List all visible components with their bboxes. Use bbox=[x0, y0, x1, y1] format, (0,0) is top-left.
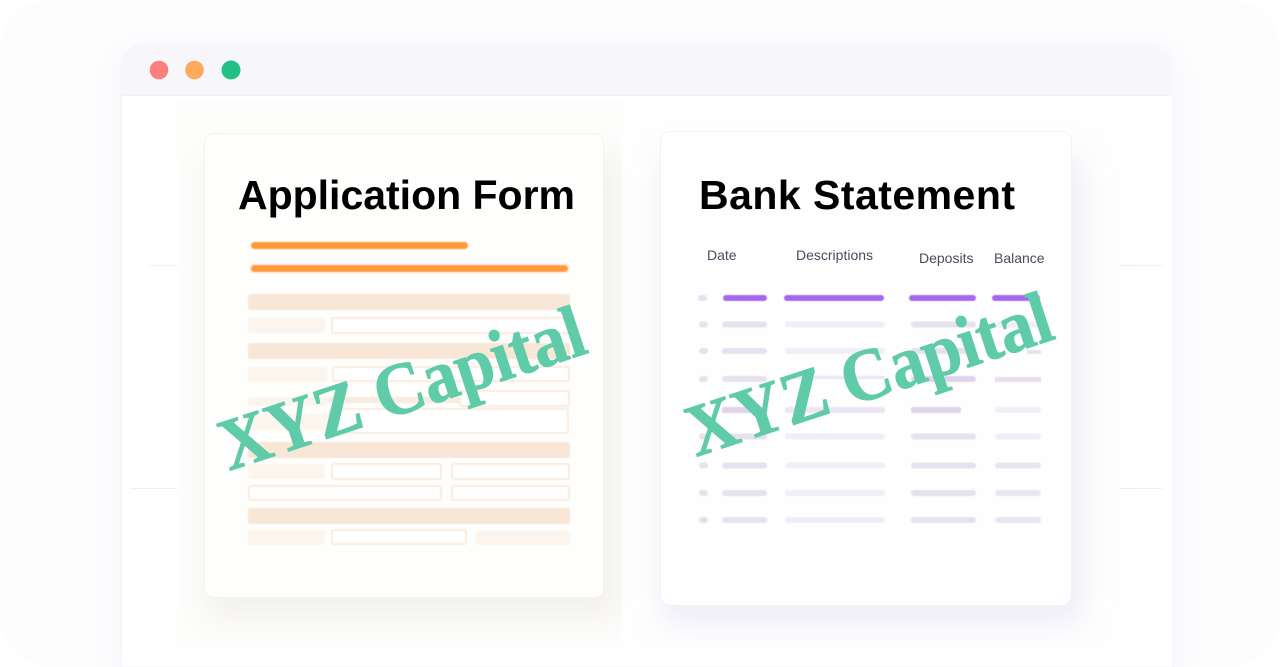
panel: bank statement bbox=[660, 132, 1082, 625]
table column headers: Date bbox=[707, 247, 737, 263]
watermark: xyz capital right: XYZ Capital bbox=[676, 277, 1062, 473]
title bar bbox=[122, 45, 1172, 95]
window control: red bbox=[150, 61, 168, 79]
table rows bbox=[699, 322, 1041, 523]
window control: green bbox=[222, 60, 240, 80]
window control: orange bbox=[185, 61, 204, 79]
heading: bank statement: Bank Statement bbox=[699, 172, 1015, 218]
content backdrop bbox=[130, 265, 1162, 489]
form rows bbox=[248, 294, 570, 545]
heading: application form: Application Form bbox=[238, 172, 575, 218]
table column headers: Descriptions bbox=[796, 247, 873, 263]
browser window bbox=[116, 44, 1178, 667]
watermark: xyz capital left: XYZ Capital bbox=[209, 291, 595, 487]
orange header lines bbox=[249, 242, 570, 274]
purple header row bbox=[698, 295, 1040, 301]
panel: application form bbox=[204, 134, 620, 620]
table column headers bbox=[707, 247, 1045, 266]
table column headers: Balance bbox=[994, 250, 1045, 266]
table column headers: Deposits bbox=[919, 250, 973, 266]
